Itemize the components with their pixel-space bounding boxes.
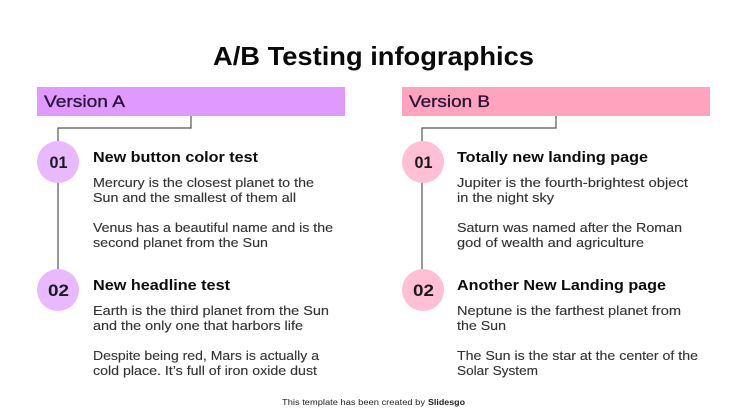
header bar B: Version B: [409, 92, 490, 111]
step 02 badge B: [402, 269, 444, 311]
step 02 text A: [93, 278, 329, 378]
panel: version B: [402, 87, 710, 378]
step 02 text A: and the only one that harbors life: [93, 319, 303, 333]
panel: version A: [37, 87, 345, 378]
connector line A: [58, 116, 191, 270]
step 01 text B: [457, 150, 689, 250]
step 02 text B: The Sun is the star at the center of the: [457, 349, 698, 363]
step 01 text B: Saturn was named after the Roman: [457, 221, 682, 235]
step 01 text A: Venus has a beautiful name and is the: [93, 221, 333, 235]
step 01 text B: in the night sky: [457, 191, 555, 205]
footer credit: [282, 398, 465, 407]
step 02 text B: the Sun: [457, 319, 506, 333]
header bar B: [402, 87, 710, 116]
step 02 text A: New headline test: [93, 278, 230, 294]
step 02 text A: Despite being red, Mars is actually a: [93, 349, 319, 363]
step 02 text B: [457, 278, 698, 378]
step 01 badge A: [37, 141, 79, 183]
step 02 text B: Solar System: [457, 364, 538, 378]
step 02 text A: cold place. It’s full of iron oxide dust: [93, 364, 318, 378]
step 02 text A: Earth is the third planet from the Sun: [93, 304, 329, 318]
step 01 text A: New button color test: [93, 150, 258, 166]
step 02 text B: Neptune is the farthest planet from: [457, 304, 681, 318]
step 01 badge A: 01: [50, 154, 68, 172]
step 02 badge B: 02: [413, 282, 434, 300]
header bar A: [37, 87, 345, 116]
footer credit: Slidesgo: [428, 398, 465, 407]
step 02 badge A: [37, 269, 79, 311]
step 02 badge A: 02: [48, 282, 69, 300]
connector line B: [422, 116, 556, 270]
header bar A: Version A: [44, 92, 126, 111]
title: A/B Testing infographics: [213, 41, 534, 71]
step 01 text A: [93, 150, 333, 250]
step 01 text B: god of wealth and agriculture: [457, 236, 644, 250]
step 02 text B: Another New Landing page: [457, 278, 666, 294]
step 01 text A: second planet from the Sun: [93, 236, 268, 250]
step 01 text B: Totally new landing page: [457, 150, 648, 166]
step 01 badge B: 01: [414, 154, 432, 172]
step 01 text B: Jupiter is the fourth-brightest object: [457, 176, 689, 190]
step 01 text A: Sun and the smallest of them all: [93, 191, 296, 205]
footer credit: This template has been created by: [282, 398, 425, 407]
step 01 text A: Mercury is the closest planet to the: [93, 176, 314, 190]
step 01 badge B: [402, 141, 444, 183]
